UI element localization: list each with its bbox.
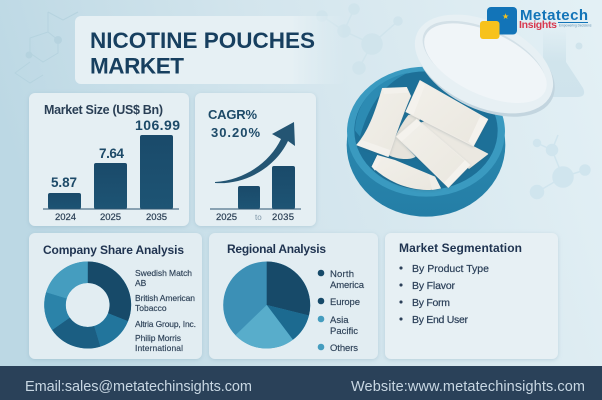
panel: market segmentation (385, 233, 558, 359)
bar chart: market size: 7.64 (99, 146, 124, 161)
bar chart: market size: 5.87 (51, 175, 77, 190)
pouch: left (357, 87, 411, 157)
bar chart: market size: 2035 (146, 212, 167, 223)
pouch: bottom (372, 155, 441, 190)
pie legend: Others (330, 343, 358, 354)
donut legend: Altria Group, Inc. (135, 319, 196, 329)
logo mark: ★ (502, 12, 509, 21)
company share heading: Company Share Analysis (43, 243, 184, 257)
donut legend: Swedish Match (135, 268, 192, 278)
pouch: rear right (420, 122, 488, 168)
CAGR bars: 2025 (216, 212, 237, 223)
tin lid (399, 0, 570, 137)
logo (480, 7, 592, 39)
logo wordmark: Insights (519, 19, 557, 31)
footer (0, 366, 602, 400)
CAGR bars: to (255, 213, 262, 222)
segmentation list (400, 263, 489, 326)
molecule decoration right (530, 135, 590, 198)
donut legend: British American (135, 293, 195, 303)
product: pouch tin (347, 67, 505, 217)
pie chart (223, 262, 310, 348)
molecule decoration top centre (317, 4, 402, 74)
bar chart: market size: 106.99 (135, 117, 180, 133)
panel: company share (29, 233, 202, 359)
segmentation list: By Flavor (412, 280, 456, 292)
segmentation heading: Market Segmentation (399, 241, 522, 255)
donut legend: Philip Morris (135, 333, 181, 343)
panel: CAGR (195, 93, 316, 226)
donut chart (55, 272, 120, 338)
donut legend: International (135, 343, 183, 353)
pouch: top right (406, 81, 488, 146)
CAGR bars: 2035 (272, 212, 294, 223)
bar chart: market size: 2025 (100, 212, 121, 223)
bar chart: market size (43, 117, 180, 223)
pouch: rear middle (388, 115, 420, 159)
footer website: Website:www.metatechinsights.com (351, 379, 585, 395)
pouch: front centre (397, 119, 470, 187)
bar chart: market size: 2024 (55, 212, 76, 223)
regional heading: Regional Analysis (227, 242, 326, 256)
logo wordmark: Empowering Decisions (559, 24, 592, 28)
donut legend: AB (135, 278, 147, 288)
molecule decoration left (15, 12, 78, 83)
logo wordmark: Metatech (520, 7, 588, 24)
pie legend: America (330, 280, 365, 291)
pie legend (318, 269, 365, 354)
tin base (347, 67, 505, 217)
title: NICOTINE POUCHES (90, 28, 315, 53)
CAGR bars (210, 166, 301, 223)
segmentation list: By End User (412, 314, 468, 326)
pie legend: Europe (330, 297, 360, 308)
pie legend: Pacific (330, 326, 358, 337)
panel: market size (29, 93, 189, 226)
title panel: MARKET (90, 54, 184, 78)
flask decoration (529, 28, 584, 97)
pie legend: North (330, 269, 354, 280)
CAGR value: 30.20% (211, 125, 260, 140)
donut legend (135, 268, 196, 353)
market size heading: Market Size (US$ Bn) (44, 103, 163, 117)
donut legend: Tobacco (135, 303, 167, 313)
title panel (75, 16, 345, 84)
segmentation list: By Form (412, 297, 450, 309)
pouches (357, 81, 488, 190)
pie legend: Asia (330, 315, 349, 326)
footer email: Email:sales@metatechinsights.com (25, 379, 252, 395)
panel: regional analysis (209, 233, 378, 359)
logo wordmark (519, 7, 592, 31)
CAGR label: CAGR% (208, 107, 257, 122)
segmentation list: By Product Type (412, 263, 489, 275)
arrow: growth (215, 122, 295, 183)
